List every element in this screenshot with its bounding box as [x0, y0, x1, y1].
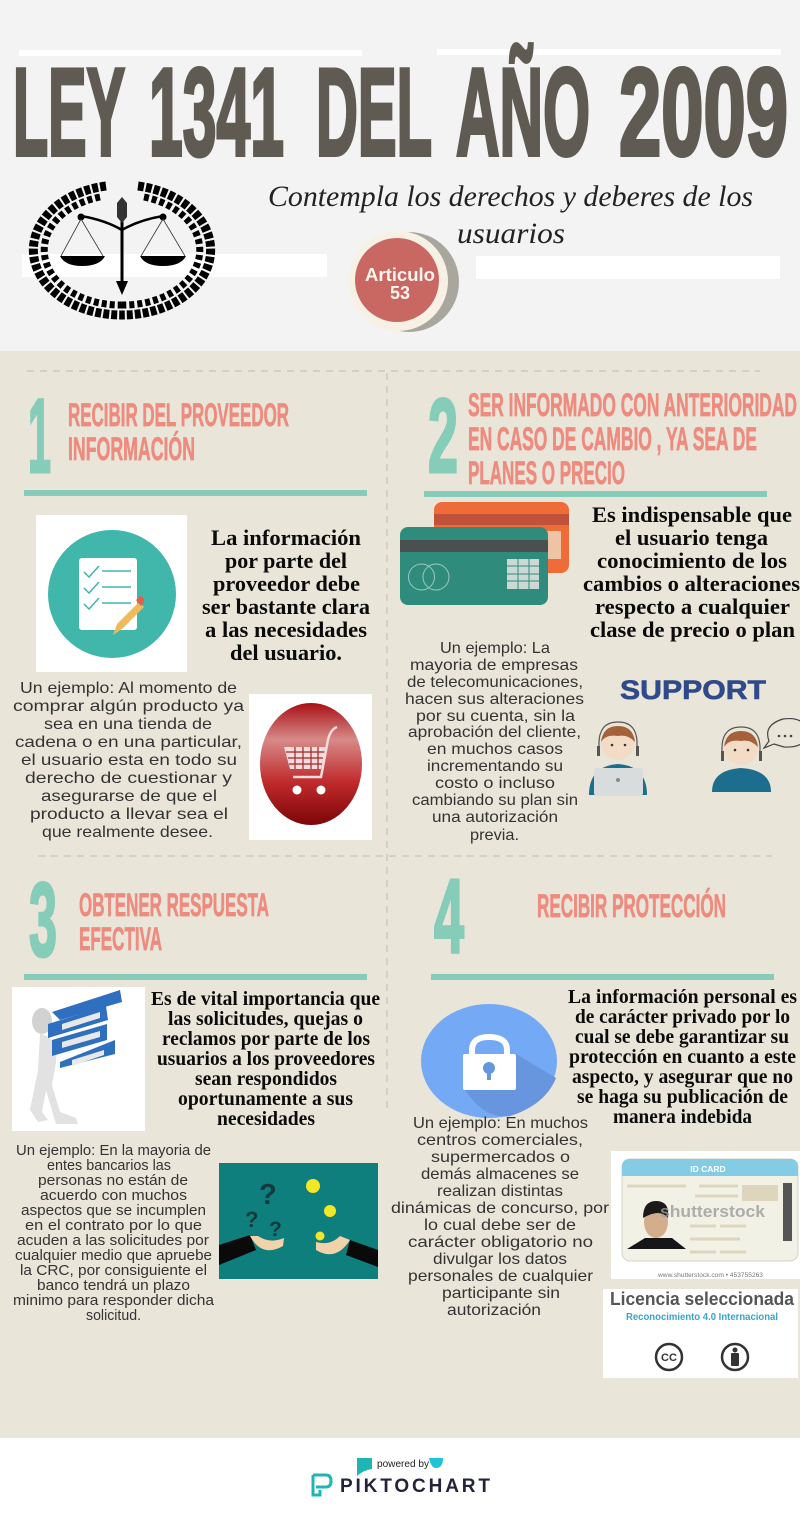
example 1: que realmente desee.: [42, 824, 213, 841]
panel: header: [13, 44, 788, 332]
panel: section 1: [13, 378, 372, 841]
text block 3: [151, 989, 380, 1130]
image: license: Licencia seleccionada: [610, 1288, 795, 1309]
example 3: entes bancarios las: [47, 1158, 171, 1174]
example 1: asegurarse de que el: [41, 788, 217, 805]
text block 4: aspecto, y asegurar que no: [572, 1067, 793, 1088]
title: [13, 44, 788, 182]
badge: Articulo 53: [348, 231, 459, 332]
icon: checklist: [36, 515, 187, 672]
panel: section 2: [400, 378, 800, 844]
example 1: producto a llevar sea el: [30, 806, 228, 823]
text block 4: se haga su publicación de: [577, 1087, 788, 1108]
text block 4: La información personal es: [568, 987, 797, 1008]
subtitle: [268, 180, 753, 250]
text block 3: Es de vital importancia que: [151, 989, 380, 1010]
footer: Piktochart logo: PIKTOCHART: [340, 1476, 490, 1497]
example 1: el usuario esta en todo su: [21, 752, 237, 769]
image: license: CC: [661, 1352, 677, 1364]
example 2: mayoria de empresas: [410, 657, 578, 674]
example 2: de telecomunicaciones,: [407, 674, 583, 691]
icon: support agent with speech bubble: [712, 719, 800, 792]
text block 3: oportunamente a sus: [178, 1089, 353, 1110]
text block 3: reclamos por parte de los: [162, 1029, 370, 1050]
number 2: 2: [428, 378, 458, 495]
text block 4: [568, 987, 797, 1128]
text block 2: conocimiento de los: [597, 548, 787, 573]
badge: Articulo 53: Articulo: [365, 265, 435, 285]
text block 1: del usuario.: [230, 640, 342, 665]
example 4: lo cual debe ser de: [424, 1217, 576, 1234]
title: 1341: [149, 44, 284, 182]
example 2: costo o incluso: [435, 775, 555, 792]
image: ID card: [611, 1151, 800, 1279]
example 3: banco tendrá un plazo: [37, 1278, 190, 1294]
example 4: carácter obligatorio no: [408, 1234, 593, 1251]
example 3: acuden a las solicitudes por: [17, 1233, 209, 1249]
heading 3: OBTENER RESPUESTA: [79, 887, 269, 923]
example 2: en muchos casos: [427, 741, 563, 758]
image: hands with question marks and light bulbs: [219, 1163, 378, 1279]
example 3: en el contrato por lo que: [25, 1218, 202, 1234]
example 2: aprobación del cliente,: [408, 724, 581, 741]
example 4: [391, 1115, 610, 1319]
heading 1: INFORMACIÓN: [68, 431, 195, 467]
image: hands with question marks and light bulbs: ?: [269, 1218, 282, 1241]
example 1: comprar algún producto ya: [13, 698, 244, 715]
text block 1: por parte del: [225, 548, 347, 573]
subtitle: Contempla los derechos y deberes de los: [268, 180, 753, 213]
example 2: [405, 640, 584, 844]
icon: shopping cart: [249, 694, 372, 840]
example 2: Un ejemplo: La: [440, 640, 550, 657]
example 4: divulgar los datos: [433, 1251, 567, 1268]
text block 1: [202, 525, 370, 665]
icon: credit cards: [400, 502, 569, 605]
example 2: una autorización: [432, 809, 558, 826]
footer: Piktochart logo: [313, 1458, 490, 1497]
text block 1: La información: [211, 525, 361, 550]
heading 2: [468, 387, 797, 491]
panel: section 3: [12, 862, 380, 1324]
example 2: incrementando su: [427, 758, 563, 775]
panel: section 3: 3: [29, 862, 57, 979]
example 4: personales de cualquier: [408, 1268, 594, 1285]
title: DEL: [316, 44, 432, 182]
text block 2: clase de precio o plan: [590, 617, 795, 642]
text block 2: el usuario tenga: [615, 525, 768, 550]
example 4: Un ejemplo: En muchos: [413, 1115, 588, 1132]
text block 4: protección en cuanto a este: [569, 1047, 796, 1068]
image: ID card: shutterstock: [660, 1202, 766, 1221]
title: AÑO: [456, 44, 590, 182]
example 3: personas no están de: [38, 1173, 188, 1189]
text block 3: las solicitudes, quejas o: [168, 1009, 363, 1030]
example 4: centros comerciales,: [417, 1132, 583, 1149]
image: figure carrying binders: [12, 987, 145, 1131]
example 1: cadena o en una particular,: [15, 734, 242, 751]
image: ID card: www.shutterstock.com • 453755263: [657, 1273, 764, 1279]
text block 1: proveedor debe: [213, 571, 360, 596]
heading 1: RECIBIR DEL PROVEEDOR: [68, 397, 289, 433]
example 3: solicitud.: [86, 1308, 141, 1324]
example 4: demás almacenes se: [421, 1166, 579, 1183]
icon: padlock: [421, 1004, 557, 1118]
support illustration: [589, 675, 800, 796]
text block 2: cambios o alteraciones: [583, 571, 800, 596]
example 3: Un ejemplo: En la mayoria de: [16, 1143, 211, 1159]
text block 2: [583, 502, 800, 642]
text block 3: necesidades: [217, 1109, 315, 1130]
example 4: autorización: [447, 1302, 541, 1319]
example 4: participante sin: [442, 1285, 560, 1302]
heading 3: [79, 887, 269, 957]
text block 4: de carácter privado por lo: [575, 1007, 790, 1028]
image: hands with question marks and light bulbs: ?: [259, 1179, 277, 1211]
text block 2: respecto a cualquier: [595, 594, 790, 619]
icon: scales of justice in a laurel wreath: [33, 186, 211, 315]
example 3: aspectos que se incumplen: [21, 1203, 206, 1219]
heading 2: PLANES O PRECIO: [468, 455, 625, 491]
number 4: 4: [434, 858, 464, 975]
image: license: [603, 1288, 798, 1378]
panel: section 1: 1: [28, 378, 51, 495]
heading 3: EFECTIVA: [79, 921, 162, 957]
heading 1: [68, 397, 289, 467]
text block 1: a las necesidades: [205, 617, 367, 642]
example 1: Un ejemplo: Al momento de: [20, 680, 237, 697]
text block 4: cual se debe garantizar su: [575, 1027, 789, 1048]
text block 1: ser bastante clara: [202, 594, 370, 619]
title: LEY: [13, 44, 125, 182]
example 2: previa.: [470, 827, 519, 844]
text block 2: Es indispensable que: [592, 502, 792, 527]
example 1: derecho de cuestionar y: [25, 770, 232, 787]
subtitle: usuarios: [457, 217, 565, 250]
example 1: [13, 680, 244, 841]
image: license: Reconocimiento 4.0 Internacional: [626, 1311, 778, 1323]
text block 3: usuarios a los proveedores: [157, 1049, 375, 1070]
example 1: sea en una tienda de: [44, 716, 212, 733]
example 3: cualquier medio que apruebe: [15, 1248, 212, 1264]
support illustration: SUPPORT: [620, 675, 767, 705]
example 3: minimo para responder dicha: [13, 1293, 215, 1309]
example 3: la CRC, por consiguiente el: [20, 1263, 207, 1279]
image: ID card: ID CARD: [690, 1164, 726, 1174]
example 4: realizan distintas: [437, 1183, 563, 1200]
example 3: [13, 1143, 215, 1324]
example 4: dinámicas de concurso, por: [391, 1200, 610, 1217]
panel: section 4: [391, 858, 800, 1378]
image: hands with question marks and light bulbs: ?: [245, 1207, 258, 1232]
example 3: acuerdo con muchos: [40, 1188, 187, 1204]
text block 3: sean respondidos: [195, 1069, 337, 1090]
example 2: por su cuenta, sin la: [416, 708, 575, 725]
footer: Piktochart logo: powered by: [377, 1459, 429, 1470]
icon: support agent with laptop: [589, 722, 647, 796]
example 4: supermercados o: [431, 1149, 570, 1166]
example 2: cambiando su plan sin: [412, 792, 578, 809]
badge: Articulo 53: 53: [390, 283, 410, 303]
text block 4: manera indebida: [613, 1107, 752, 1128]
example 2: hacen sus alteraciones: [405, 691, 584, 708]
